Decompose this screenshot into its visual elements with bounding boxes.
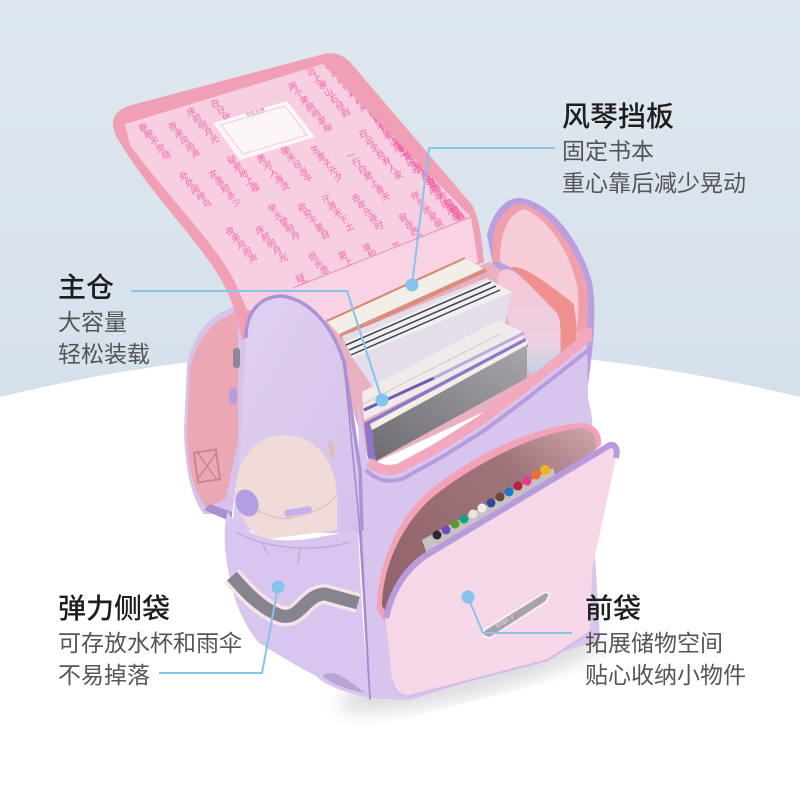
text block: front pocket: 贴心收纳小物件 [585, 662, 746, 688]
flap printed text pattern: 生查子元夕 去年元夜时 花市灯如昼 [255, 79, 429, 283]
elastic side pocket [225, 511, 370, 698]
flap printed text pattern: 两个黄鹂鸣翠柳 一行白鹭上青天 窗含西岭 千秋雪 [279, 71, 458, 282]
flap printed text pattern: 夜来风雨声 花落知多少 床前明月光 疑是 [159, 111, 315, 294]
grey book [364, 338, 528, 461]
middle white books [362, 320, 524, 420]
reflective stripe [232, 576, 358, 616]
text block: elastic side pocket: 不易掉落 [58, 662, 150, 688]
text block: main compartment [58, 272, 150, 367]
text block: elastic side pocket: 可存放水杯和雨伞 [58, 630, 242, 656]
flap printed text pattern: 床前明月光 疑是地上霜 举头望明月 低头思故乡 [182, 102, 345, 293]
body front wall [358, 340, 600, 700]
compartment inside and books [325, 258, 590, 465]
compartment rim [370, 328, 587, 470]
ground shadow [333, 616, 607, 728]
front pocket flap [385, 443, 617, 696]
flap printed text pattern: 故人西辞黄鹤楼 烟花三月下扬州 孤帆远影碧空尽 [339, 74, 496, 258]
flap printed text pattern: 春眠不觉晓 处处闻啼鸟 夜来风雨声 [134, 118, 262, 267]
name label [213, 101, 315, 160]
flap printed text pattern: 朝辞白帝彩云间 千里江陵一日还 两岸猿声啼不住 轻舟 [321, 57, 500, 268]
flap printed text pattern: 白日依山尽 黄河入海流 欲穷千里目 更上一层楼 [206, 94, 375, 292]
text block: front pocket: 拓展储物空间 [585, 630, 723, 656]
text block: main compartment: 大容量 [58, 309, 127, 335]
text block: accordion divider: 重心靠后减少晃动 [562, 170, 746, 196]
callout: accordion divider leader [406, 148, 555, 292]
rear panel of main compartment [487, 198, 594, 405]
callout: front pocket leader [462, 590, 572, 633]
flap lower pleat band [293, 217, 478, 330]
flap printed text pattern: 不识庐山真面目 只缘身在此山中 [389, 133, 493, 254]
pencil case [497, 267, 576, 375]
flap printed text pattern: 远上寒山石径斜 白云生处有人家 停车坐爱枫林晚 霜叶 [303, 63, 482, 274]
open flap [113, 53, 504, 340]
shoulder strap [184, 306, 246, 522]
side panel [232, 296, 362, 534]
main body [232, 296, 600, 700]
text block: front pocket [585, 593, 746, 688]
name label: 书包名牌 [245, 106, 266, 119]
flap printed text pattern: 日照香炉生紫烟 遥看瀑布挂前川 飞流直下 [365, 105, 504, 267]
marker tray [422, 465, 572, 558]
water bottle [231, 435, 337, 540]
back book with orange edge [327, 258, 486, 336]
flap printed text pattern [138, 66, 466, 284]
text block: accordion divider [562, 101, 746, 196]
text block: accordion divider: 风琴挡板 [562, 101, 674, 132]
text block: elastic side pocket: 弹力侧袋 [58, 593, 170, 624]
striped book [342, 278, 512, 387]
text block: accordion divider: 固定书本 [562, 138, 654, 164]
brand badge [483, 592, 550, 638]
text block: main compartment: 轻松装载 [58, 341, 150, 367]
callout: side pocket leader [159, 580, 284, 673]
backpack illustration [113, 53, 617, 700]
flap printed text pattern: 锄禾日当午 汗滴禾下土 谁知盘中餐 [231, 87, 399, 284]
callout: main compartment leader [131, 291, 388, 406]
front pocket interior [377, 423, 601, 622]
text block: front pocket: 前袋 [585, 593, 641, 624]
text block: main compartment: 主仓 [58, 272, 114, 303]
text block: elastic side pocket [58, 593, 242, 688]
brand badge: KINA·Y [495, 615, 516, 630]
